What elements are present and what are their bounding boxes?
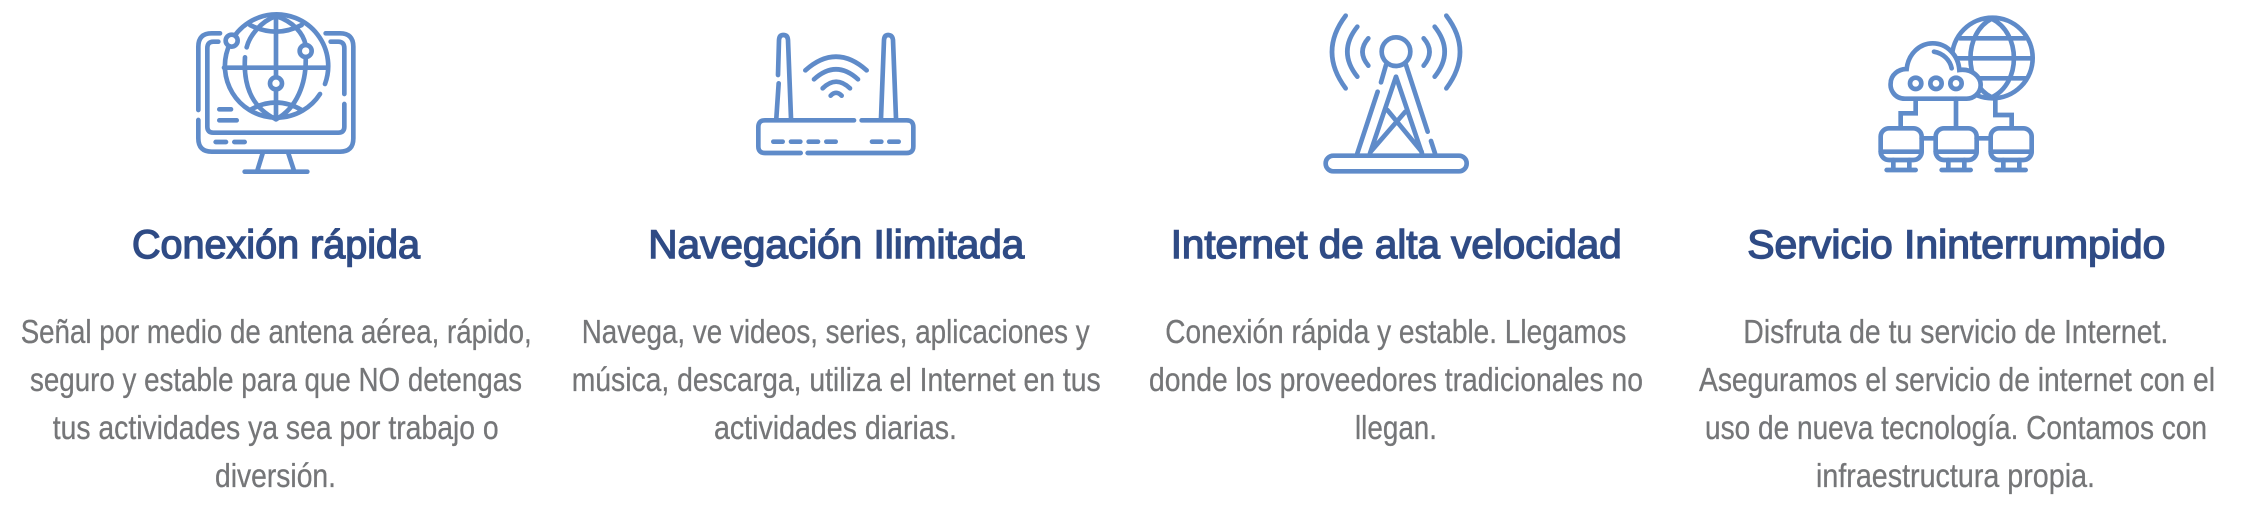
text block: Navegación Ilimitada description: actividades diarias. — [714, 409, 957, 446]
heading: Internet de alta velocidad: Internet de alta velocidad — [1171, 223, 1622, 267]
panel: Navegación Ilimitada — [572, 35, 1101, 446]
text block: Navegación Ilimitada description: música, descarga, utiliza el Internet en tus — [572, 361, 1101, 398]
text block: Servicio Ininterrumpido description: infraestructura propia. — [1816, 457, 2095, 494]
text block: Conexión rápida description — [21, 313, 532, 494]
heading: Servicio Ininterrumpido: Servicio Ininterrumpido — [1747, 223, 2165, 267]
text block: Conexión rápida description: Señal por medio de antena aérea, rápido, — [21, 313, 532, 350]
icon: cloud network with globe — [1881, 18, 2033, 170]
text block: Navegación Ilimitada description: Navega, ve videos, series, aplicaciones y — [582, 313, 1090, 350]
panel: Servicio Ininterrumpido — [1699, 18, 2215, 494]
panel: Conexión rápida — [21, 14, 532, 494]
panel: Internet de alta velocidad — [1149, 16, 1643, 446]
icon: signal tower — [1326, 16, 1467, 171]
heading: Navegación Ilimitada: Navegación Ilimitada — [648, 223, 1025, 267]
text block: Conexión rápida description: diversión. — [215, 457, 336, 494]
text block: Internet de alta velocidad description: Conexión rápida y estable. Llegamos — [1165, 313, 1626, 350]
text block: Servicio Ininterrumpido description — [1699, 313, 2215, 494]
heading: Conexión rápida: Conexión rápida — [132, 223, 421, 267]
icon: monitor with globe — [198, 14, 353, 172]
text block: Internet de alta velocidad description: donde los proveedores tradicionales no — [1149, 361, 1643, 398]
text block: Servicio Ininterrumpido description: Disfruta de tu servicio de Internet. — [1743, 313, 2168, 350]
text block: Internet de alta velocidad description: llegan. — [1355, 409, 1437, 446]
text block: Conexión rápida description: seguro y estable para que NO detengas — [30, 361, 522, 398]
icon: wifi router — [758, 35, 913, 153]
text block: Conexión rápida description: tus actividades ya sea por trabajo o — [53, 409, 499, 446]
text block: Internet de alta velocidad description — [1149, 313, 1643, 446]
text block: Navegación Ilimitada description — [572, 313, 1101, 446]
